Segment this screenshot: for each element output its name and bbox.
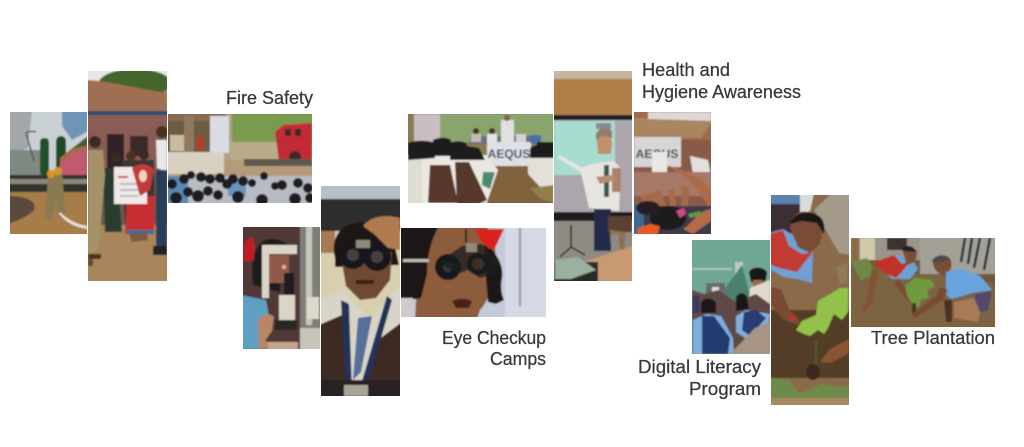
photo: health educator pointing to a projected slide: [554, 71, 632, 281]
photo: girl at slit lamp eye machine: [243, 227, 320, 349]
heading: Eye Checkup Camps: [442, 328, 546, 369]
photo: close-up of girl with trial lens and red ribbon: [401, 228, 546, 317]
photo: girl wearing trial lens frame, hand on head: [321, 186, 400, 396]
heading: Digital Literacy Program: [638, 357, 761, 399]
heading: Health and Hygiene Awareness: [642, 60, 801, 102]
photo: seated schoolgirls facing Aequus Foundation banner: [408, 114, 553, 203]
heading: Eye Checkup Camps: Camps: [490, 349, 546, 369]
heading: Digital Literacy Program: Program: [689, 379, 761, 399]
photo: officers handing a safety poster to women: [88, 71, 167, 281]
heading: Health and Hygiene Awareness: Hygiene Awareness: [642, 82, 801, 102]
photo: fire safety talk with seated students and fire engine: [168, 114, 312, 203]
heading: Health and Hygiene Awareness: Health and: [642, 60, 730, 80]
photo: two boys planting a sapling near a fence: [851, 238, 995, 327]
photo: students at a computer in a green classroom: [692, 240, 770, 354]
photo: seated schoolgirls facing Aequus Foundation banner: AEQUS: [488, 147, 530, 161]
photo: children raising hands in front of banner: AEQUS: [636, 147, 678, 161]
heading: Fire Safety: Fire Safety: [226, 88, 313, 108]
photo: firefighters spraying hose: [10, 112, 87, 234]
heading: Eye Checkup Camps: Eye Checkup: [442, 328, 546, 348]
photo: boy in red vest planting a sapling: [771, 195, 849, 405]
photo: children raising hands in front of banner: [634, 112, 711, 234]
heading: Tree Plantation: Tree Plantation: [871, 328, 995, 348]
heading: Digital Literacy Program: Digital Literacy: [638, 357, 761, 377]
